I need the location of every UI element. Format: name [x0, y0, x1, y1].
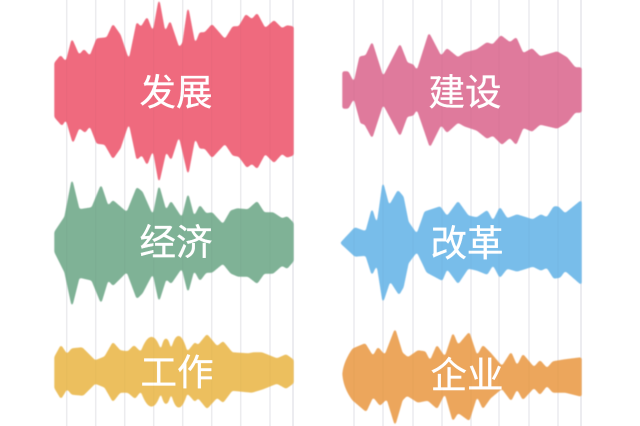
label: 改革: 改革	[430, 223, 504, 264]
panel: 经济 waveform	[55, 181, 293, 305]
label: 经济: 经济	[140, 222, 212, 263]
label: 企业: 企业	[430, 355, 504, 396]
panel: 改革 waveform	[341, 184, 581, 301]
label: 建设: 建设	[428, 72, 502, 113]
waveform: 经济 green	[55, 181, 293, 305]
waveform: 企业 orange	[343, 330, 581, 424]
waveform: 工作 yellow	[55, 335, 293, 408]
label: 发展: 发展	[140, 72, 212, 113]
waveform: 建设 pink	[343, 34, 581, 146]
panel: 建设 waveform	[343, 34, 581, 146]
panel: 工作 waveform	[55, 335, 293, 408]
waveform: 发展 red	[55, 1, 293, 181]
panel: 发展 waveform	[55, 1, 293, 181]
waveform: 改革 blue	[341, 184, 581, 301]
panel: 企业 waveform	[343, 330, 581, 424]
label: 工作: 工作	[140, 352, 214, 393]
